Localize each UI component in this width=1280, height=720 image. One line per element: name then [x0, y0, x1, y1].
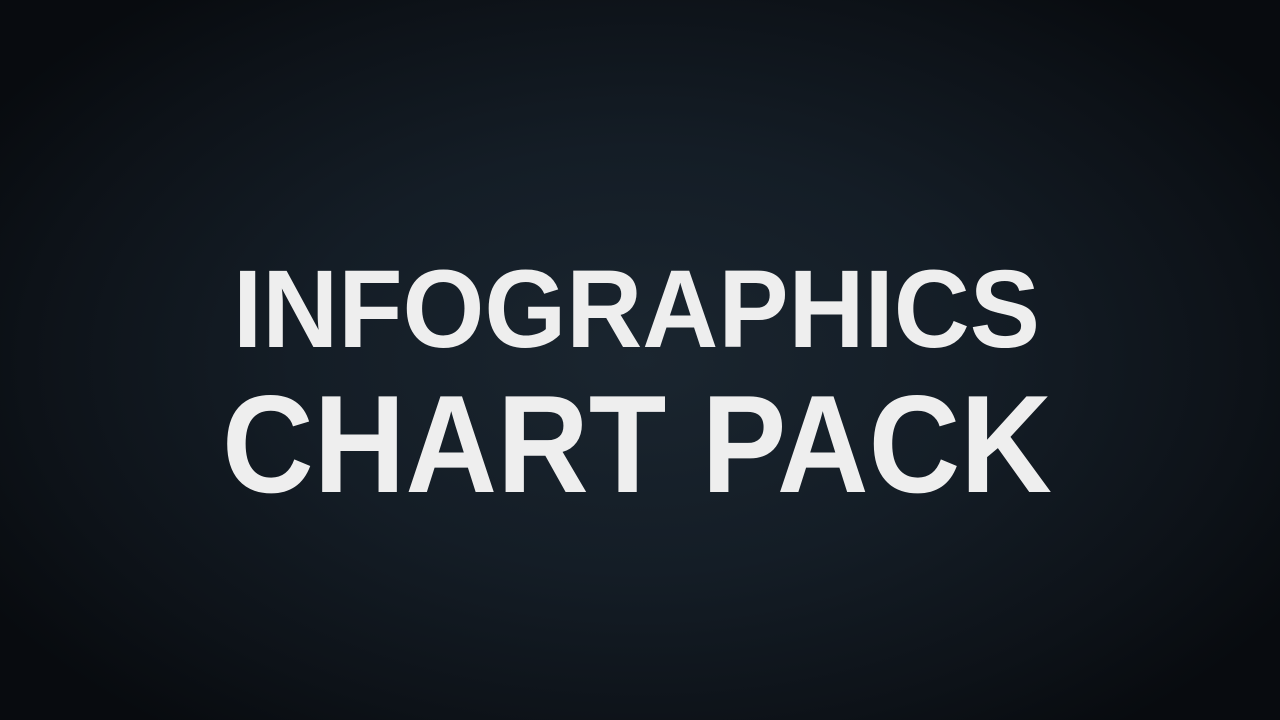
title line 2: CHART PACK: CHART PACK: [222, 367, 1052, 522]
title line 1: INFOGRAPHICS: INFOGRAPHICS: [233, 248, 1040, 371]
